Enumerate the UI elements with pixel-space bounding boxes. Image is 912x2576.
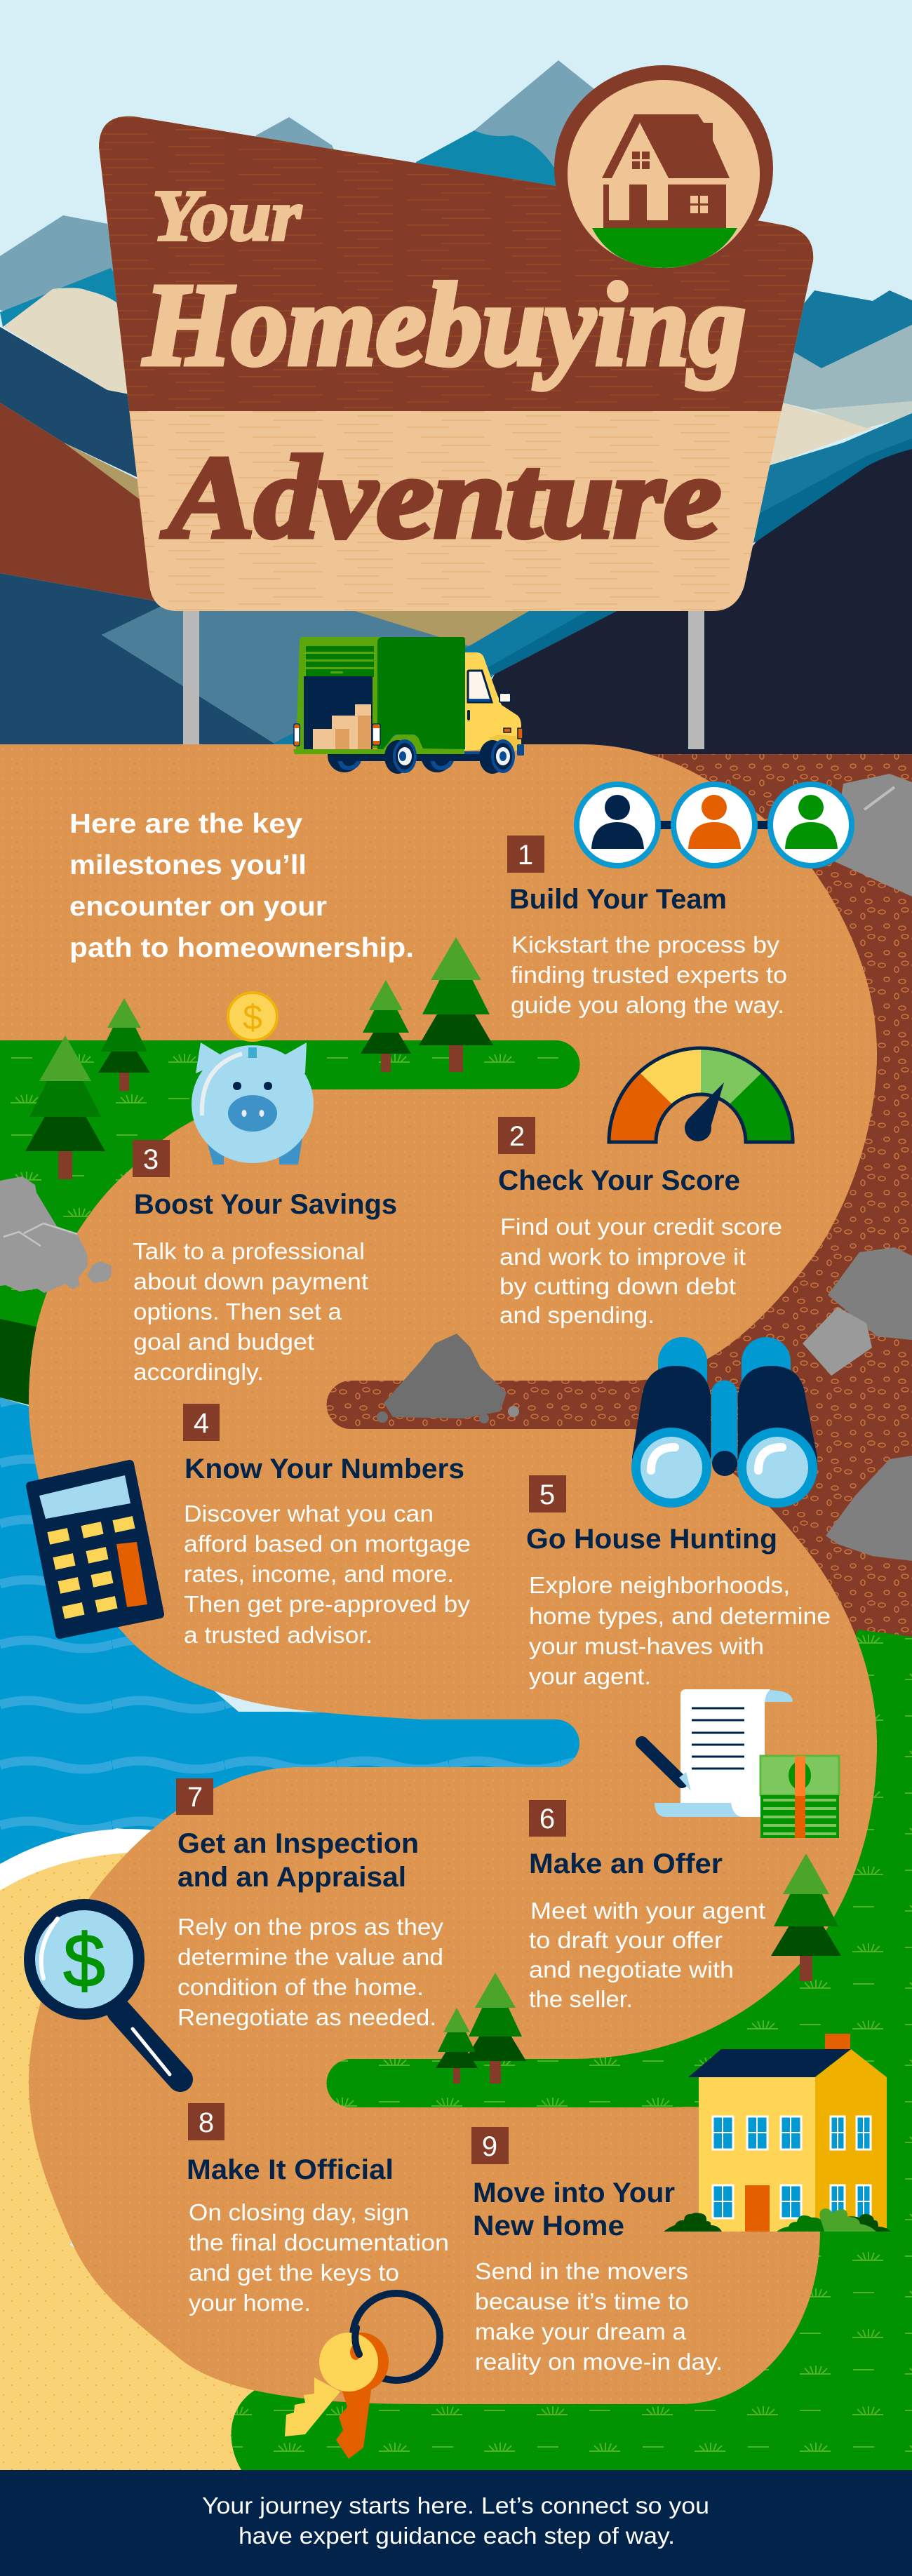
step 8: Make It Official: and get the keys to bbox=[189, 2260, 399, 2286]
step 4: Know Your Numbers: afford based on mortgage bbox=[184, 1531, 471, 1557]
step 7: Get an Inspection and an Appraisal: Renegotiate as needed. bbox=[177, 2004, 436, 2030]
step 4: Know Your Numbers bbox=[183, 1404, 471, 1648]
step 2: Check Your Score: and spending. bbox=[499, 1302, 655, 1328]
intro text: path to homeownership. bbox=[69, 933, 414, 963]
winding orange path bbox=[0, 744, 877, 2404]
intro text bbox=[69, 809, 414, 963]
step 4: Know Your Numbers: Know Your Numbers bbox=[185, 1454, 464, 1484]
title line: Adventure: Adventure bbox=[161, 432, 721, 563]
background: river bbox=[0, 1397, 582, 1864]
step 8: Make It Official: your home. bbox=[189, 2290, 311, 2316]
icon: keys on ring bbox=[285, 2293, 440, 2459]
step 9: Move into Your New Home: because it’s time to bbox=[475, 2288, 689, 2314]
intro text: Here are the key bbox=[69, 809, 302, 839]
step 2: Check Your Score: Find out your credit score bbox=[500, 1214, 782, 1240]
background: upper-left meadow bbox=[0, 1040, 582, 1410]
step 4: Know Your Numbers: a trusted advisor. bbox=[184, 1622, 373, 1648]
step 1: Build Your Team: finding trusted experts to bbox=[511, 962, 787, 988]
step 1: Build Your Team: guide you along the way. bbox=[511, 992, 784, 1018]
step 7: Get an Inspection and an Appraisal bbox=[176, 1778, 444, 2030]
background: lower-right meadow bbox=[232, 1630, 912, 2470]
step 5: Go House Hunting: Explore neighborhoods, bbox=[529, 1572, 790, 1598]
icon: binoculars bbox=[631, 1337, 817, 1508]
step 2: Check Your Score: by cutting down debt bbox=[499, 1273, 736, 1299]
step 4: Know Your Numbers: rates, income, and more. bbox=[184, 1561, 454, 1587]
rocks along the trail and shore bbox=[0, 1176, 912, 1561]
icon: moving truck bbox=[293, 637, 524, 774]
step 3: Boost Your Savings: about down payment bbox=[133, 1268, 368, 1294]
step 2: Check Your Score: and work to improve it bbox=[499, 1244, 746, 1270]
sign posts bbox=[183, 603, 704, 749]
icon: contract scroll, pen and money bbox=[642, 1689, 839, 1838]
step 3: Boost Your Savings bbox=[133, 1140, 397, 1385]
step 7: Get an Inspection and an Appraisal: condition of the home. bbox=[177, 1974, 424, 2000]
step 7: Get an Inspection and an Appraisal: 7 bbox=[187, 1782, 203, 1813]
background: dirt trail bbox=[323, 754, 912, 1684]
intro text: milestones you’ll bbox=[69, 850, 307, 880]
step 8: Make It Official: the final documentation bbox=[189, 2229, 449, 2255]
wooden sign with title bbox=[99, 116, 813, 611]
step 1: Build Your Team: Build Your Team bbox=[509, 884, 727, 915]
step 3: Boost Your Savings: 3 bbox=[143, 1144, 159, 1175]
step 3: Boost Your Savings: goal and budget bbox=[133, 1329, 314, 1355]
step 6: Make an Offer: and negotiate with bbox=[529, 1957, 734, 1983]
step 9: Move into Your New Home: reality on move-in day. bbox=[475, 2349, 723, 2375]
footer banner: have expert guidance each step of way. bbox=[239, 2523, 675, 2549]
background: beach bbox=[0, 1829, 309, 2470]
step 8: Make It Official: 8 bbox=[199, 2107, 214, 2138]
step 7: Get an Inspection and an Appraisal: and an Appraisal bbox=[177, 1862, 406, 1893]
step 7: Get an Inspection and an Appraisal: determine the value and bbox=[177, 1944, 443, 1970]
step 1: Build Your Team: 1 bbox=[518, 840, 533, 871]
icon: piggy bank with coin: $ bbox=[243, 998, 262, 1037]
step 2: Check Your Score bbox=[498, 1117, 782, 1328]
icon: piggy bank with coin bbox=[192, 993, 314, 1165]
step 5: Go House Hunting: your must-haves with bbox=[529, 1633, 764, 1659]
step 5: Go House Hunting: 5 bbox=[539, 1480, 555, 1510]
step 9: Move into Your New Home: Move into Your bbox=[473, 2178, 675, 2208]
trees in upper meadow bbox=[25, 937, 493, 1179]
step 9: Move into Your New Home: Send in the movers bbox=[475, 2258, 688, 2284]
step 3: Boost Your Savings: accordingly. bbox=[133, 1359, 264, 1385]
step 6: Make an Offer bbox=[529, 1800, 765, 2012]
step 6: Make an Offer: Make an Offer bbox=[529, 1849, 723, 1879]
icon: calculator bbox=[30, 1464, 160, 1635]
step 5: Go House Hunting: Go House Hunting bbox=[526, 1524, 777, 1555]
step 4: Know Your Numbers: Discover what you can bbox=[184, 1501, 434, 1527]
step 5: Go House Hunting bbox=[526, 1475, 831, 1689]
icon: yellow house bbox=[664, 2034, 891, 2232]
icon: credit score gauge bbox=[609, 1048, 793, 1142]
step 6: Make an Offer: Meet with your agent bbox=[530, 1898, 765, 1924]
step 2: Check Your Score: 2 bbox=[509, 1121, 525, 1152]
footer banner: Your journey starts here. Let’s connect so you bbox=[202, 2493, 709, 2518]
step 4: Know Your Numbers: 4 bbox=[194, 1408, 209, 1439]
step 3: Boost Your Savings: options. Then set a bbox=[133, 1299, 342, 1324]
step 6: Make an Offer: to draft your offer bbox=[529, 1927, 723, 1953]
step 8: Make It Official: Make It Official bbox=[187, 2154, 394, 2185]
step 6: Make an Offer: the seller. bbox=[529, 1986, 633, 2012]
trees on lower meadow finger bbox=[436, 1973, 526, 2084]
step 3: Boost Your Savings: Talk to a professional bbox=[133, 1238, 365, 1264]
step 4: Know Your Numbers: Then get pre-approved by bbox=[184, 1591, 471, 1617]
step 5: Go House Hunting: your agent. bbox=[529, 1663, 651, 1689]
step 1: Build Your Team: Kickstart the process by bbox=[511, 932, 780, 958]
step 9: Move into Your New Home: make your dream a bbox=[475, 2319, 687, 2344]
title line: Your: Your bbox=[152, 175, 302, 256]
step 6: Make an Offer: 6 bbox=[539, 1804, 555, 1834]
step 9: Move into Your New Home: New Home bbox=[473, 2211, 624, 2241]
tree next to step 6 bbox=[771, 1853, 841, 1981]
step 7: Get an Inspection and an Appraisal: Rely on the pros as they bbox=[177, 1914, 444, 1940]
footer banner bbox=[0, 2470, 912, 2576]
step 8: Make It Official bbox=[187, 2103, 449, 2316]
step 1: Build Your Team bbox=[507, 836, 787, 1018]
step 9: Move into Your New Home bbox=[471, 2127, 723, 2375]
step 2: Check Your Score: Check Your Score bbox=[498, 1165, 740, 1196]
icon: team of three people bbox=[577, 784, 852, 866]
step 3: Boost Your Savings: Boost Your Savings bbox=[134, 1189, 397, 1220]
step 9: Move into Your New Home: 9 bbox=[482, 2131, 497, 2162]
icon: house emblem bbox=[554, 65, 773, 271]
step 8: Make It Official: On closing day, sign bbox=[189, 2199, 409, 2225]
icon: magnifying glass with dollar sign bbox=[29, 1905, 180, 2079]
step 5: Go House Hunting: home types, and determine bbox=[529, 1603, 831, 1629]
icon: boulder beside the team bbox=[831, 774, 912, 897]
title line: Homebuying: Homebuying bbox=[142, 260, 746, 390]
step 7: Get an Inspection and an Appraisal: Get an Inspection bbox=[177, 1828, 419, 1859]
intro text: encounter on your bbox=[69, 892, 327, 922]
icon: magnifying glass with dollar sign: $ bbox=[63, 1918, 105, 2003]
sky and mountains background bbox=[0, 0, 912, 772]
